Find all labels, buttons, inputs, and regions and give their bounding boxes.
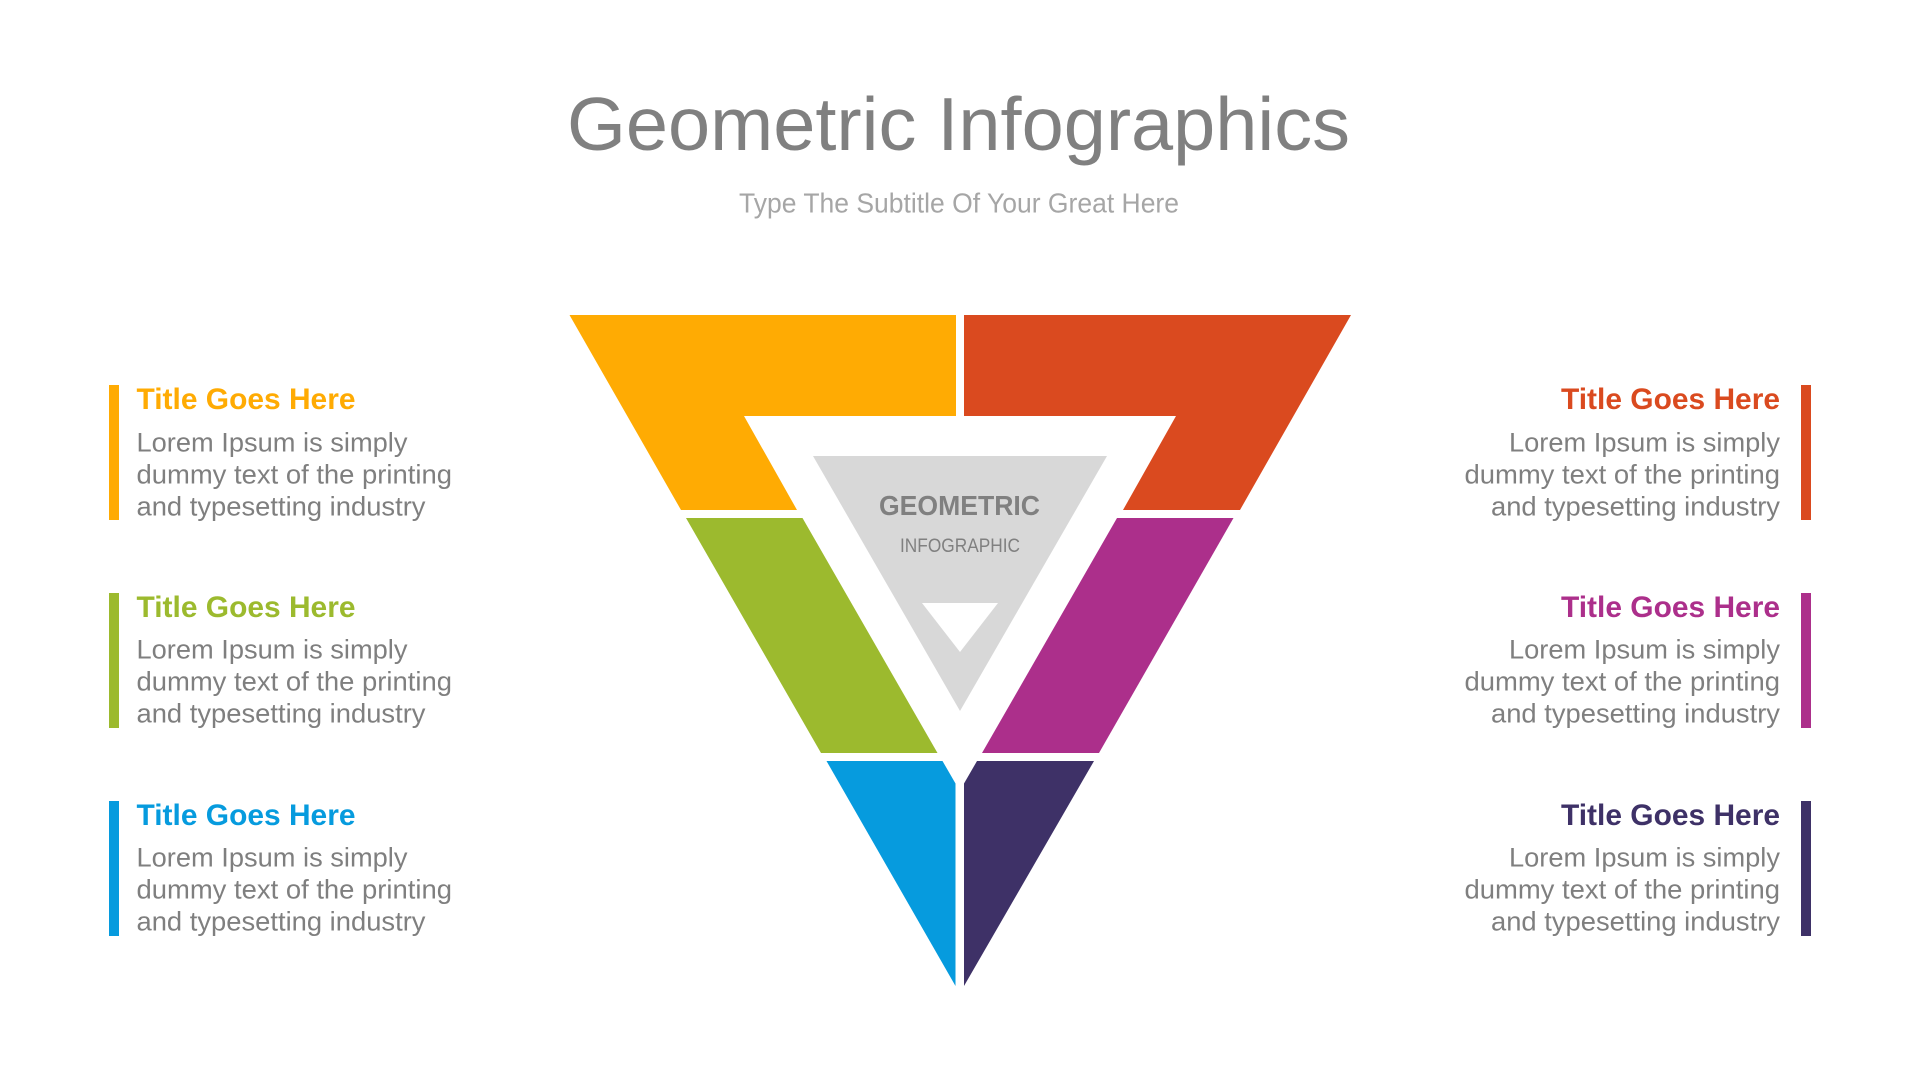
item title: Title Goes Here	[136, 383, 356, 416]
item body	[1464, 842, 1780, 936]
panel: left item 1 orange	[109, 383, 452, 522]
item title: Title Goes Here	[136, 799, 356, 832]
segment: navy	[964, 761, 1094, 986]
item body	[136, 428, 452, 522]
item body: and typesetting industry	[136, 698, 426, 728]
item body: and typesetting industry	[136, 906, 426, 936]
accent bar	[1801, 801, 1811, 936]
panel: left item 2 green	[109, 591, 452, 728]
accent bar	[1801, 385, 1811, 520]
item body: Lorem Ipsum is simply	[1509, 634, 1780, 664]
segment: green	[686, 518, 938, 753]
item body: dummy text of the printing	[136, 460, 452, 490]
item title: Title Goes Here	[1561, 799, 1780, 832]
center small white triangle	[922, 603, 998, 652]
subtitle: Type The Subtitle Of Your Great Here	[739, 188, 1179, 218]
item body: Lorem Ipsum is simply	[1509, 842, 1780, 872]
accent bar	[109, 385, 119, 520]
geometric triangle diagram	[570, 315, 1351, 986]
segment: red	[964, 315, 1351, 510]
item body: and typesetting industry	[1491, 906, 1780, 936]
panel: right item 2 purple	[1464, 591, 1811, 728]
item body: dummy text of the printing	[136, 666, 452, 696]
item body: and typesetting industry	[136, 492, 426, 522]
segment: blue	[826, 761, 956, 986]
accent bar	[109, 801, 119, 936]
segment: purple	[982, 518, 1234, 753]
item body	[1464, 428, 1780, 522]
item body: dummy text of the printing	[136, 874, 452, 904]
item body: dummy text of the printing	[1464, 874, 1780, 904]
item body	[136, 842, 452, 936]
segment: orange	[570, 315, 956, 510]
panel: right item 1 red	[1464, 383, 1811, 522]
item body: and typesetting industry	[1491, 698, 1780, 728]
item body: Lorem Ipsum is simply	[136, 842, 408, 872]
item body: Lorem Ipsum is simply	[136, 428, 408, 458]
item title: Title Goes Here	[1561, 591, 1780, 624]
item title: Title Goes Here	[136, 591, 356, 624]
item body: Lorem Ipsum is simply	[1509, 428, 1780, 458]
item body	[1464, 634, 1780, 728]
item body: dummy text of the printing	[1464, 460, 1780, 490]
panel: left item 3 blue	[109, 799, 452, 936]
item body: Lorem Ipsum is simply	[136, 634, 408, 664]
item title: Title Goes Here	[1561, 383, 1780, 416]
accent bar	[1801, 593, 1811, 728]
item body	[136, 634, 452, 728]
center heading: GEOMETRIC	[879, 490, 1040, 521]
title: Geometric Infographics	[567, 82, 1350, 166]
center triangle	[813, 456, 1107, 711]
accent bar	[109, 593, 119, 728]
panel: right item 3 navy	[1464, 799, 1811, 936]
item body: dummy text of the printing	[1464, 666, 1780, 696]
item body: and typesetting industry	[1491, 492, 1780, 522]
center subheading: INFOGRAPHIC	[900, 536, 1020, 557]
